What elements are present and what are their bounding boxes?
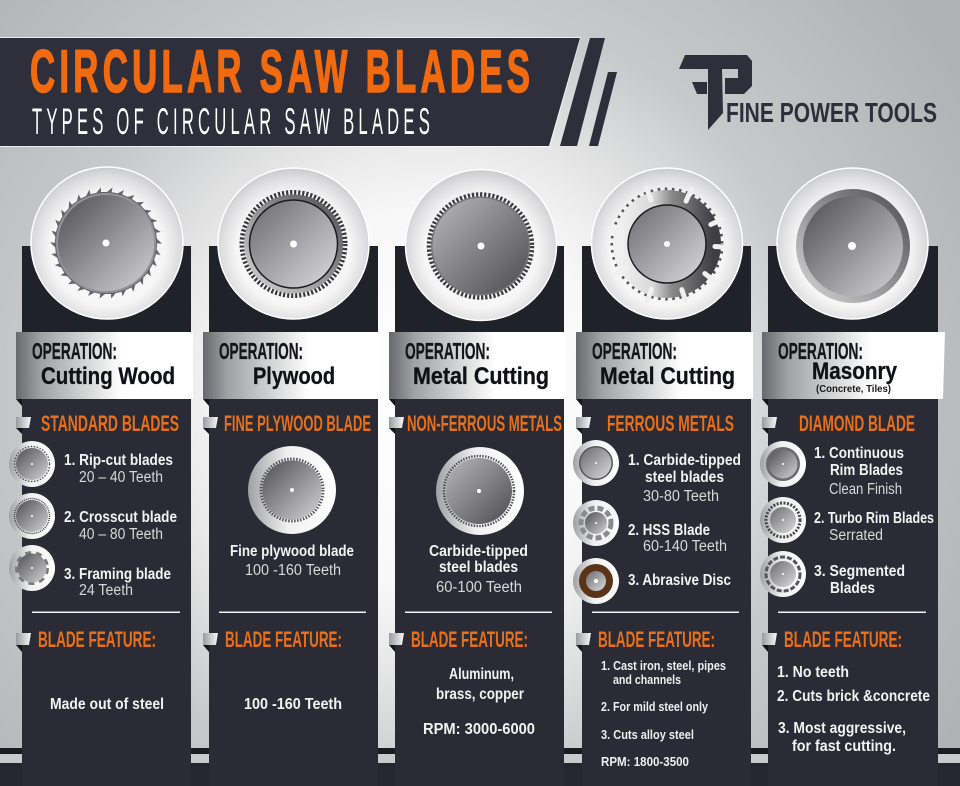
- blade: non-ferrous: [406, 170, 556, 320]
- section heading: [203, 411, 371, 436]
- blade feature: BLADE FEATURE:: [38, 627, 156, 652]
- blade feature: 100 -160 Teeth: [244, 696, 342, 713]
- text: HSS: 2. HSS Blade: [628, 522, 710, 539]
- blade feature: 1. No teeth: [777, 664, 849, 681]
- logo: [679, 55, 937, 130]
- text: HSS: 60-140 Teeth: [643, 538, 727, 555]
- text: framing: [64, 566, 171, 599]
- blade feature: for fast cutting.: [792, 738, 896, 755]
- section heading: FINE PLYWOOD BLADE: [224, 411, 371, 436]
- operation band: [576, 332, 753, 406]
- text: carbide blade: 60-100 Teeth: [436, 579, 522, 596]
- text: rip-cut: [64, 452, 173, 486]
- text: plywood blade: Fine plywood blade: [230, 543, 354, 560]
- small blade: framing: [9, 545, 55, 591]
- small blade: crosscut: [9, 493, 55, 539]
- operation band: [389, 332, 566, 406]
- small blade: carbide-tipped: [573, 440, 619, 486]
- text: turbo rim: Serrated: [829, 527, 883, 544]
- section heading: FERROUS METALS: [607, 411, 734, 436]
- small blade: rip-cut: [9, 441, 55, 487]
- blade feature: [16, 627, 164, 713]
- blade feature: [203, 627, 342, 713]
- blade feature: Made out of steel: [50, 696, 164, 713]
- section heading: [389, 411, 562, 436]
- header banner: [0, 37, 581, 147]
- header slashes: [560, 38, 617, 146]
- title: CIRCULAR SAW BLADES: [30, 39, 530, 105]
- subtitle: TYPES OF CIRCULAR SAW BLADES: [32, 102, 430, 143]
- blade feature: BLADE FEATURE:: [225, 627, 342, 652]
- section heading: [576, 411, 734, 436]
- text: continuous rim: Clean Finish: [829, 481, 902, 498]
- text: crosscut: 2. Crosscut blade: [64, 509, 177, 526]
- text: continuous rim: Rim Blades: [830, 462, 903, 479]
- text: turbo rim: 2. Turbo Rim Blades: [814, 510, 934, 527]
- text: crosscut: 40 – 80 Teeth: [79, 526, 163, 543]
- small blade: HSS: [573, 500, 619, 546]
- medium blade: plywood: [248, 446, 336, 534]
- operation band: OPERATION:: [778, 338, 863, 364]
- blade feature: [762, 627, 930, 755]
- section heading: [16, 411, 179, 436]
- blade feature: BLADE FEATURE:: [411, 627, 528, 652]
- blade feature: 1. Cast iron, steel, pipes: [601, 659, 726, 673]
- text: HSS: [628, 522, 727, 555]
- blade: diamond: [777, 168, 928, 319]
- column 4: metal cutting ferrous: [573, 168, 753, 786]
- blade: plywood: [218, 168, 369, 319]
- text: carbide-tipped: steel blades: [645, 469, 724, 486]
- blade feature: 2. Cuts brick &concrete: [777, 688, 930, 705]
- text: carbide blade: Carbide-tipped: [429, 543, 528, 560]
- operation band: Plywood: [253, 363, 335, 390]
- text: turbo rim: [814, 510, 934, 544]
- section heading: NON-FERROUS METALS: [407, 411, 562, 436]
- operation band: [203, 332, 380, 406]
- operation band: OPERATION:: [219, 338, 303, 364]
- text: carbide blade: steel blades: [439, 559, 518, 576]
- section heading: [762, 411, 915, 436]
- medium blade: carbide: [436, 447, 524, 535]
- text: carbide-tipped: [628, 452, 741, 505]
- text: segmented: 3. Segmented: [814, 563, 905, 580]
- text: segmented: Blades: [830, 580, 875, 597]
- operation band: [16, 332, 193, 406]
- blade feature: BLADE FEATURE:: [598, 627, 715, 652]
- blade feature: 2. For mild steel only: [601, 700, 708, 714]
- text: abrasive disc: 3. Abrasive Disc: [628, 572, 731, 589]
- blade feature: 3. Cuts alloy steel: [601, 728, 694, 742]
- text: plywood blade: [230, 543, 354, 579]
- column 5: masonry: [760, 168, 945, 786]
- text: carbide blade: [429, 543, 528, 596]
- blade feature: 3. Most aggressive,: [778, 720, 906, 737]
- operation band: Metal Cutting: [600, 363, 735, 390]
- column 3: metal cutting non-ferrous: [389, 170, 566, 786]
- text: framing: 3. Framing blade: [64, 566, 171, 583]
- column 1: cutting wood: [9, 167, 193, 786]
- blade feature: and channels: [613, 673, 681, 687]
- blade feature: Aluminum,: [449, 666, 514, 683]
- text: carbide-tipped: 30-80 Teeth: [643, 488, 719, 505]
- text: rip-cut: 20 – 40 Teeth: [79, 469, 163, 486]
- text: crosscut: [64, 509, 177, 543]
- operation band: [762, 332, 945, 406]
- text: continuous rim: 1. Continuous: [814, 445, 904, 462]
- bottom strips: [0, 748, 960, 786]
- text: continuous rim: [814, 445, 904, 498]
- blade feature: brass, copper: [436, 686, 524, 703]
- text: segmented: [814, 563, 905, 597]
- blade feature: [389, 627, 535, 738]
- small blade: continuous rim: [760, 441, 806, 487]
- logo mark: [679, 55, 752, 130]
- text: plywood blade: 100 -160 Teeth: [245, 562, 341, 579]
- blade feature: [576, 627, 726, 769]
- blade: ferrous: [592, 168, 742, 319]
- text: carbide-tipped: 1. Carbide-tipped: [628, 452, 741, 469]
- blade feature: RPM: 1800-3500: [601, 755, 689, 769]
- section heading: STANDARD BLADES: [41, 411, 179, 436]
- blade: standard: [31, 167, 183, 319]
- small blade: turbo rim: [760, 497, 806, 543]
- operation band: OPERATION:: [405, 338, 490, 364]
- operation band: Metal Cutting: [413, 363, 549, 390]
- operation band: Cutting Wood: [41, 363, 175, 390]
- blade feature: RPM: 3000-6000: [423, 721, 535, 738]
- text: rip-cut: 1. Rip-cut blades: [64, 452, 173, 469]
- operation band: Masonry: [812, 358, 898, 385]
- small blade: segmented: [760, 551, 806, 597]
- operation band: OPERATION:: [32, 338, 117, 364]
- text: framing: 24 Teeth: [79, 582, 133, 599]
- small blade: abrasive disc: [573, 558, 619, 604]
- column 2: plywood: [203, 168, 380, 786]
- operation band: (Concrete, Tiles): [816, 384, 891, 395]
- operation band: OPERATION:: [592, 338, 677, 364]
